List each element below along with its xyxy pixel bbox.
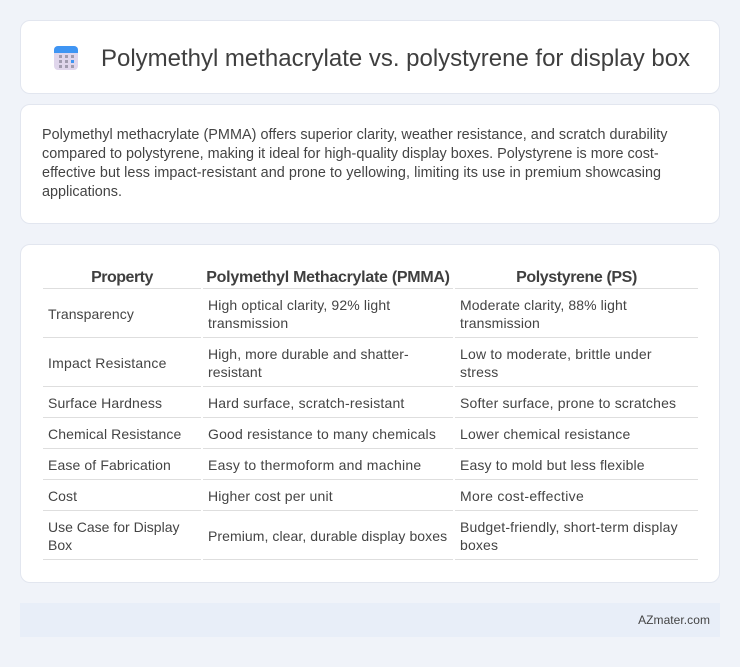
summary text — [42, 127, 668, 200]
row: transparency: High optical clarity, 92% light — [208, 297, 390, 313]
row: impact resistance: Impact Resistance — [48, 355, 167, 371]
row: impact resistance — [48, 346, 652, 380]
header panel — [20, 20, 720, 94]
summary text: effective but less impact-resistant and prone to yellowing, limiting its use in premium showcasing — [42, 165, 661, 181]
row: impact resistance: resistant — [208, 364, 262, 380]
icon: calendar — [54, 46, 78, 70]
row: transparency: Moderate clarity, 88% light — [460, 297, 627, 313]
row: cost: More cost-effective — [460, 488, 584, 504]
summary panel — [20, 104, 720, 224]
footer text: AZmater.com — [638, 613, 710, 627]
row: ease of fabrication: Easy to mold but less flexible — [460, 457, 645, 473]
row: use case: Use Case for Display — [48, 519, 180, 535]
column headers — [91, 269, 637, 286]
row: cost — [48, 488, 584, 504]
row: use case: boxes — [460, 537, 498, 553]
row: use case: Premium, clear, durable display boxes — [208, 528, 447, 544]
column headers: Polystyrene (PS) — [516, 269, 637, 286]
row: ease of fabrication: Ease of Fabrication — [48, 457, 171, 473]
column headers: Polymethyl Methacrylate (PMMA) — [206, 269, 450, 286]
row: ease of fabrication: Easy to thermoform and machine — [208, 457, 421, 473]
row: surface hardness — [48, 395, 676, 411]
title: Polymethyl methacrylate vs. polystyrene for display box — [101, 45, 690, 72]
row: surface hardness: Softer surface, prone to scratches — [460, 395, 676, 411]
row: cost: Cost — [48, 488, 77, 504]
column headers: Property — [91, 269, 153, 286]
row: use case: Box — [48, 537, 72, 553]
row: use case — [48, 519, 678, 553]
row: ease of fabrication — [48, 457, 645, 473]
row: use case: Budget-friendly, short-term display — [460, 519, 678, 535]
row: impact resistance: stress — [460, 364, 498, 380]
row: transparency — [48, 297, 627, 331]
row: transparency: transmission — [460, 315, 540, 331]
row: chemical resistance — [48, 426, 630, 442]
row: surface hardness: Hard surface, scratch-resistant — [208, 395, 405, 411]
row: cost: Higher cost per unit — [208, 488, 333, 504]
row: transparency: Transparency — [48, 306, 134, 322]
table panel — [20, 244, 720, 583]
row: surface hardness: Surface Hardness — [48, 395, 162, 411]
footer bar — [20, 603, 720, 637]
summary text: applications. — [42, 184, 122, 200]
summary text: compared to polystyrene, making it ideal for high-quality display boxes. Polystyrene is more cost- — [42, 146, 659, 162]
row: impact resistance: High, more durable and shatter- — [208, 346, 409, 362]
row: chemical resistance: Good resistance to many chemicals — [208, 426, 436, 442]
row: impact resistance: Low to moderate, brittle under — [460, 346, 652, 362]
row: transparency: transmission — [208, 315, 288, 331]
row: chemical resistance: Lower chemical resistance — [460, 426, 630, 442]
row: chemical resistance: Chemical Resistance — [48, 426, 181, 442]
summary text: Polymethyl methacrylate (PMMA) offers superior clarity, weather resistance, and scratch durability — [42, 127, 667, 143]
